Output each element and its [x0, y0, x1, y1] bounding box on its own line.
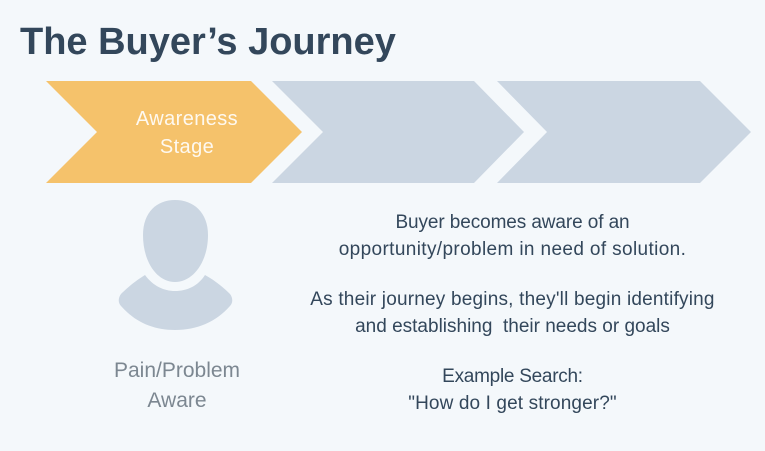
title: The Buyer’s Journey: [20, 21, 396, 63]
chevron process row: [46, 81, 751, 183]
description: awareness: opportunity/problem in need of solution.: [339, 239, 686, 260]
chevron: awareness stage: Stage: [160, 136, 214, 158]
description: journey begins: As their journey begins, they'll begin identifying: [310, 289, 715, 310]
description text block: [310, 212, 715, 414]
chevron: second stage: [272, 81, 524, 183]
description: journey begins: and establishing their needs or goals: [355, 316, 670, 337]
description: awareness: [339, 212, 686, 260]
chevron: awareness stage: [46, 81, 302, 183]
description: awareness: Buyer becomes aware of an: [395, 212, 630, 233]
description: journey begins: [310, 289, 715, 337]
persona label: Aware: [147, 389, 207, 412]
chevron: awareness stage: Awareness: [136, 108, 238, 130]
persona label: Pain/Problem: [114, 359, 240, 382]
persona label: [114, 359, 240, 412]
icon: person silhouette: [118, 200, 232, 330]
chevron: third stage: [497, 81, 751, 183]
description: example search: "How do I get stronger?": [408, 393, 617, 414]
description: example search: Example Search:: [442, 366, 583, 387]
description: example search: [408, 366, 617, 414]
